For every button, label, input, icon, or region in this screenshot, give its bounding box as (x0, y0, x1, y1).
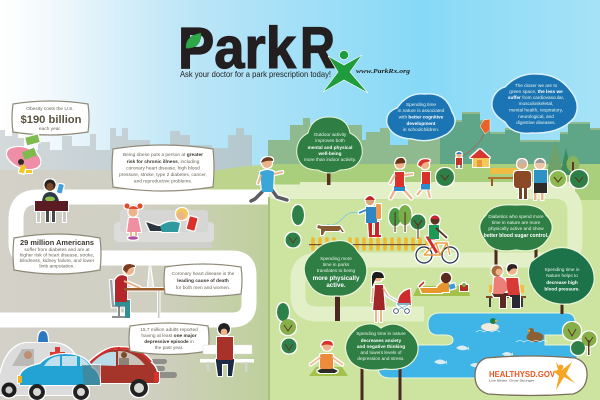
callout: diabetes: higher risk of heart disease, stroke, (20, 252, 94, 258)
icon: woman with stroller (372, 272, 411, 322)
tree: anxiety (345, 324, 418, 400)
icon: ambulance (0, 331, 78, 398)
icon: sofa with children (114, 203, 214, 248)
title: Park: Park (178, 16, 297, 81)
callout: diabetes: 29 million Americans (20, 238, 94, 247)
cloud: cognitive development: Spending time (406, 102, 436, 107)
icon: small trees center (389, 205, 426, 239)
tree: mental and physical: improves both (315, 138, 345, 143)
icon: leaf (186, 33, 201, 48)
tree: blood pressure: Spending time in (545, 267, 580, 272)
icon: piggy bank and money (5, 134, 43, 174)
logo: HealthySD.gov: Live Better. Grow Stronger. (489, 378, 535, 382)
callout: chronic illness: and reproductive problems. (134, 178, 192, 184)
callout: obesity cost: each year. (39, 126, 61, 132)
cloud: cognitive development: in schoolchildren. (403, 127, 439, 132)
cloud: green space: The closer we are to (515, 83, 558, 88)
icon: exhaust smoke (150, 359, 177, 378)
tree: more physically active: translates to being (317, 268, 356, 273)
icon: bushes top right (436, 168, 588, 188)
ground seam (268, 197, 270, 400)
url: www.ParkRx.org (356, 68, 411, 75)
tree: blood sugar: Diabetics who spend more (488, 214, 544, 219)
tree: blood sugar (480, 205, 552, 266)
tree: mental and physical: mental and physical (308, 145, 352, 150)
ground left (0, 170, 270, 400)
cloud: green space: musculoskeletal, (519, 101, 553, 106)
right top path overlay (300, 182, 575, 199)
tree: blood sugar: time in nature are more (492, 220, 541, 225)
icon: cyclist (416, 215, 458, 263)
sky background (0, 0, 600, 175)
icon: kite (463, 119, 490, 156)
callout: diabetes: blindness, kidney failure, and lower (20, 258, 95, 264)
tree: more physically active: more physically (313, 275, 360, 282)
tree: blood pressure: decrease high (546, 280, 578, 285)
tree: more physically active: time in parks (323, 262, 350, 267)
icon: man on bench (200, 323, 254, 376)
callout: heart disease (164, 264, 242, 296)
tree: blood pressure: Nature helps to (546, 273, 578, 278)
icon: trees left of park (277, 205, 304, 354)
callout: heart disease: Coronary heart disease is the (172, 271, 235, 277)
fence (309, 239, 427, 249)
pond (378, 313, 577, 378)
cloud: cognitive development: with better cognitive (399, 114, 443, 120)
callout: depression (129, 323, 209, 354)
icon: elderly couple (514, 159, 547, 200)
tree: anxiety: Spending time in nature (356, 331, 406, 336)
path right (269, 192, 575, 314)
callout: obesity cost: $190 billion (20, 114, 82, 126)
callout: diabetes: limb amputation. (39, 264, 75, 270)
tree: more physically active (304, 240, 367, 321)
icon: red car (84, 348, 159, 397)
callout: chronic illness: pressure, stroke, type 2 diabetes, cancer, (119, 172, 207, 178)
logo: HealthySD.gov (475, 356, 587, 396)
icon: runner (251, 157, 287, 201)
tree: more physically active: active. (326, 282, 346, 289)
callout: heart disease: for both men and women. (176, 285, 230, 291)
icon: reading person on mat (413, 273, 470, 296)
icon: dog walker with dog (317, 196, 381, 237)
icon: green person (323, 50, 368, 93)
callout: depression: the past year. (155, 345, 183, 351)
icon: trees by pond (563, 322, 596, 355)
city skyline right (268, 112, 600, 170)
path left (0, 197, 270, 320)
cloud: green space: digestive diseases. (516, 120, 556, 125)
tree: mental and physical: Outdoor activity (314, 132, 347, 137)
icon: runners (390, 158, 430, 199)
callout: chronic illness: Being obese puts a person at greater (123, 153, 203, 158)
callout: diabetes: suffer from diabetes and are at (24, 247, 90, 253)
callout: chronic illness: risk for chronic illness, including (127, 160, 199, 165)
icon: background pines (546, 140, 580, 176)
icon: kid with kite (456, 152, 462, 168)
tree: anxiety: and negative thinking (357, 344, 405, 349)
tree: mental and physical: more than indoor activity. (304, 157, 356, 162)
cloud: cognitive development: development (407, 121, 436, 126)
callout: obesity cost (12, 101, 89, 135)
tree: anxiety: decreases anxiety (361, 338, 402, 343)
tree: more physically active: Spending more (320, 256, 352, 261)
cloud: green space: green space, the less we (509, 89, 563, 94)
cloud: cognitive development: in nature is associated (398, 108, 445, 113)
tree: blood sugar: better blood sugar control. (484, 233, 549, 239)
cloud: green space: mental health, respiratory, (509, 108, 563, 112)
callout: depression: 15.7 million adults reported (140, 327, 198, 333)
icon: ducks (476, 318, 548, 342)
tree: anxiety: depression and stress. (357, 356, 405, 361)
callout: chronic illness (112, 145, 214, 191)
tree: mental and physical: well-being (318, 151, 342, 156)
icon: yellow bench (488, 168, 518, 186)
ground right (269, 197, 600, 400)
icon: blue car (18, 354, 100, 400)
icon: fish (434, 346, 513, 367)
tree: blood sugar: physically active and show (488, 226, 544, 231)
tree: blood pressure: blood pressure. (544, 286, 580, 292)
hill left (210, 165, 270, 190)
icon: man with phone at desk (35, 179, 68, 222)
callout: depression: depressive episode in (144, 340, 194, 345)
callout: diabetes (13, 234, 101, 274)
callout: obesity cost: Obesity costs the U.S. (26, 106, 74, 112)
cloud: green space: suffer from cardiovascular, (508, 95, 564, 100)
cloud: cognitive development (387, 94, 455, 141)
tree: blood pressure (528, 248, 594, 314)
tree: mental and physical (297, 117, 362, 185)
callout: chronic illness: coronary heart disease, high blood (126, 166, 200, 172)
logo: HealthySD.gov: HEALTHYSD.GOV (489, 369, 555, 379)
icon: meditating person (309, 341, 348, 376)
callout: heart disease: leading cause of death (177, 278, 229, 284)
cloud: green space (492, 74, 577, 133)
title: R: R (300, 16, 335, 81)
tree: anxiety: and lowers levels of (360, 350, 402, 355)
callout: depression: having at least one major (141, 334, 197, 339)
city skyline left (0, 128, 252, 170)
skyline right darker layer (440, 114, 600, 170)
icon: man at computer (111, 264, 164, 318)
icon: house (470, 149, 490, 167)
icon: couple on bench (486, 264, 526, 308)
cloud: green space: neurological, and (518, 114, 554, 119)
subtitle: Ask your doctor for a park prescription today! (180, 69, 331, 79)
